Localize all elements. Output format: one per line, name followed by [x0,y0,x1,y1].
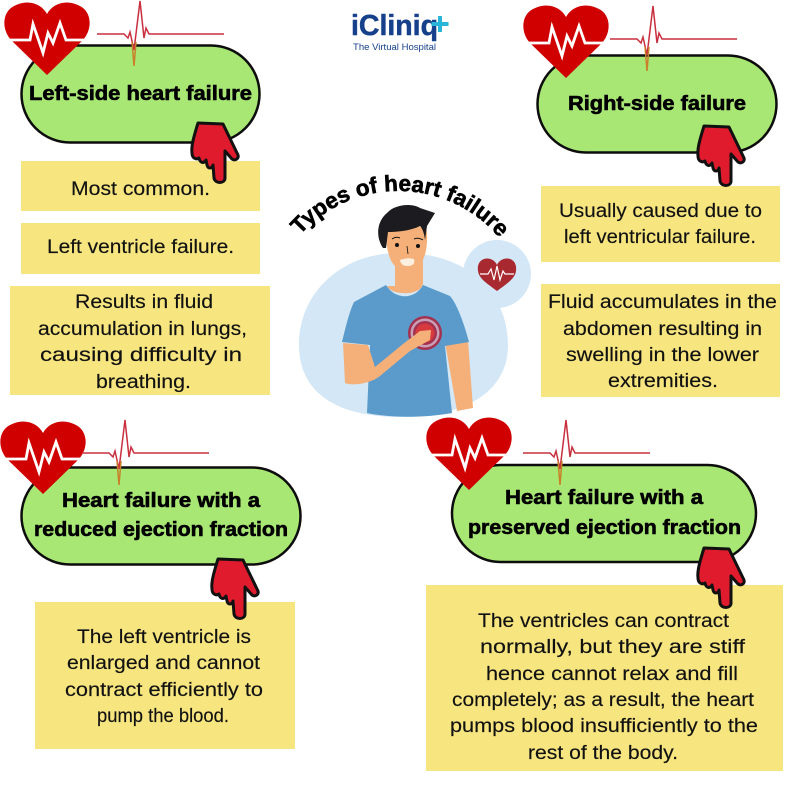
panel: preserved ejection fraction [426,418,783,771]
pill: reduced heading [22,468,300,564]
text box: left ventricle failure [21,223,260,274]
text box: fluid in lungs: accumulation in lungs, [38,319,247,340]
text box: enlarged ventricle: The left ventricle is [77,627,251,648]
pill: right-side heading: Right-side failure [568,93,746,115]
icon: ECG line [82,420,209,485]
logo: iCliniq: The Virtual Hospital [353,42,436,52]
text box: fluid in abdomen: extremities. [608,371,718,392]
pill: left-side heading: Left-side heart failure [29,83,252,105]
icon: ECG line [610,6,737,71]
pill: reduced heading: reduced ejection fraction [34,519,288,541]
text box: fluid in abdomen: swelling in the lower [566,345,760,366]
pill: preserved heading: Heart failure with a [505,487,704,509]
text box: enlarged ventricle: pump the blood. [97,706,229,727]
icon: heart with pulse [4,3,90,75]
pill: right-side heading [538,56,776,152]
illustration: man holding chest [299,205,531,417]
text box: fluid in abdomen [541,284,780,397]
text box: stiff ventricles: hence cannot relax and fill [486,664,738,685]
logo: iCliniq [351,10,448,52]
icon: heart with pulse [523,6,609,78]
icon: pointing hand [698,126,744,186]
head [386,226,427,271]
text box: stiff ventricles: pumps blood insufficiently to the [450,716,758,737]
icon: pointing hand [212,559,258,618]
shirt [342,285,469,417]
pill: preserved heading [452,465,756,562]
pill: preserved heading: preserved ejection fraction [468,517,741,539]
text box: fluid in lungs [10,286,270,395]
icon: ECG line [523,420,650,485]
pill: reduced heading: Heart failure with a [62,490,261,512]
panel: left-side heart failure [4,1,270,395]
icon: pointing hand [192,123,238,182]
text box: stiff ventricles: The ventricles can contract [478,611,730,632]
text box: enlarged ventricle [35,602,295,749]
icon: heart with pulse [426,418,512,490]
text box: fluid in lungs: causing difficulty in [40,345,242,366]
pill: left-side heading [22,46,260,142]
text box: fluid in lungs: Results in fluid [75,292,213,313]
text box: usually caused: Usually caused due to [559,201,762,222]
logo: iCliniq: iCliniq [351,10,438,42]
hair [378,205,435,248]
neck [387,255,423,293]
text box: fluid in abdomen: abdomen resulting in [563,319,762,340]
eyes, brows and mouth [392,237,423,266]
text box: most common: Most common. [71,179,210,200]
text box: most common [21,161,260,211]
text box: enlarged ventricle: contract efficiently to [65,680,263,701]
text box: usually caused [541,186,780,262]
text box: stiff ventricles: rest of the body. [528,743,678,764]
background blob [299,253,508,417]
right arm [445,340,473,411]
icon: ECG line [97,1,224,66]
icon: pointing hand [698,548,744,608]
text box: fluid in lungs: breathing. [96,372,191,393]
text box: usually caused: left ventricular failure. [564,227,756,248]
text box: left ventricle failure: Left ventricle failure. [47,237,234,258]
text box: stiff ventricles: completely; as a result, the heart [452,690,755,711]
panel: reduced ejection fraction [0,420,301,749]
text box: stiff ventricles: normally, but they are stiff [480,637,746,658]
title: curved Types of heart failure: Types of heart failure [288,174,506,236]
text box: fluid in abdomen: Fluid accumulates in the [548,292,777,313]
text box: enlarged ventricle: enlarged and cannot [67,653,261,674]
icon: heart with pulse [0,422,86,494]
left arm and hand [343,330,431,384]
badge circle with heart [463,240,531,308]
chest rings [408,316,442,350]
panel: right-side failure [523,6,780,397]
text box: stiff ventricles [426,585,783,771]
